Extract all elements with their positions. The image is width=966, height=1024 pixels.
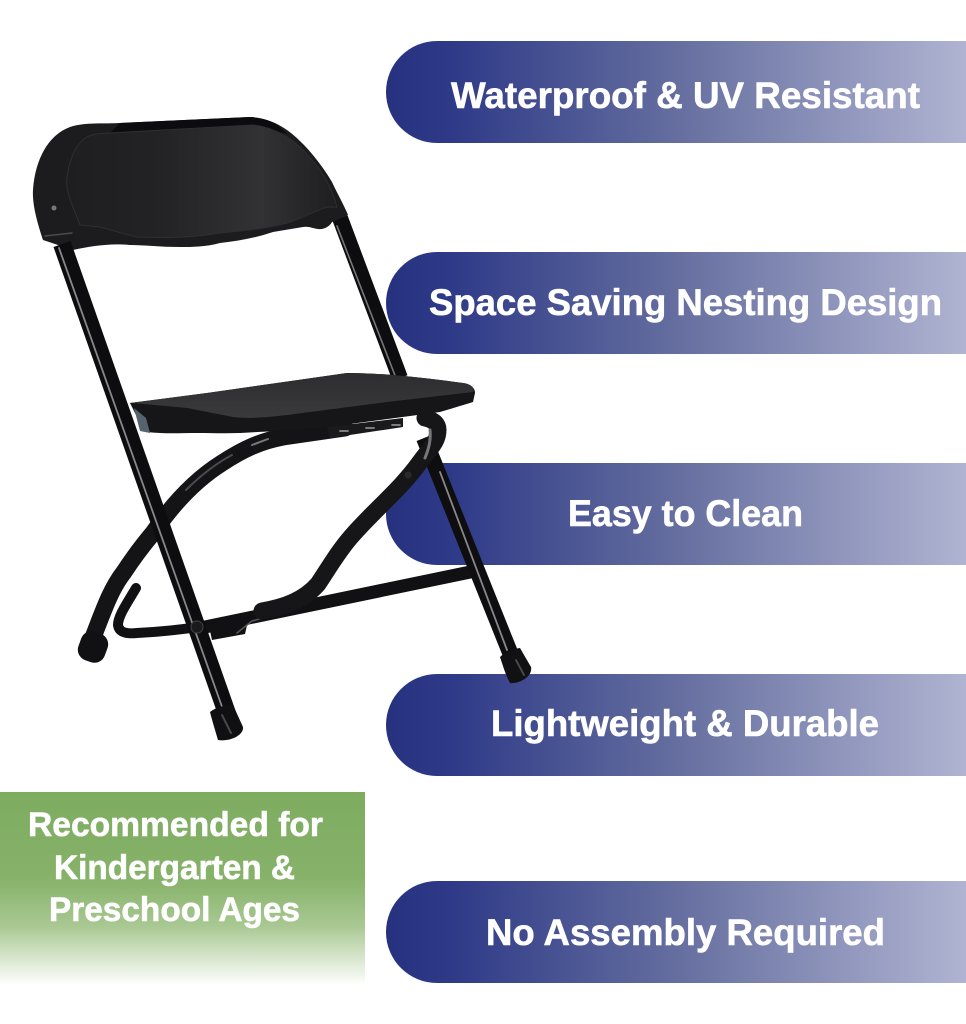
right rear upright <box>337 218 400 378</box>
feature pill: Easy to Clean: Easy to Clean <box>568 493 803 534</box>
feature pill: Waterproof and UV Resistant: Waterproof & UV Resistant <box>451 75 920 116</box>
feature pill: Easy to Clean <box>386 463 966 565</box>
left main leg <box>59 244 243 740</box>
feature pill: Waterproof and UV Resistant <box>386 41 966 143</box>
feature pill: No Assembly Required: No Assembly Required <box>486 912 885 953</box>
feature pill: Space Saving Nesting Design: Space Saving Nesting Design <box>429 282 942 323</box>
feature pill: Space Saving Nesting Design <box>386 252 966 354</box>
rear curved support tube <box>92 428 345 640</box>
lower crossbar and floor loop <box>118 570 480 640</box>
right front leg <box>424 438 531 683</box>
front U-shaped support tube <box>262 418 438 611</box>
feature pill: Lightweight and Durable <box>386 674 966 776</box>
seat <box>130 373 475 433</box>
feature pill: No Assembly Required <box>386 881 966 983</box>
age recommendation panel <box>0 792 365 984</box>
age recommendation panel: Recommended for <box>28 806 323 844</box>
age recommendation panel: Preschool Ages <box>49 891 300 929</box>
folding chair illustration <box>33 117 531 740</box>
age recommendation panel: Kindergarten & <box>54 849 295 887</box>
backrest <box>33 117 348 250</box>
rear foot cap <box>75 628 111 666</box>
feature pill: Lightweight and Durable: Lightweight & Durable <box>491 703 879 744</box>
under-seat bracket <box>327 418 403 438</box>
